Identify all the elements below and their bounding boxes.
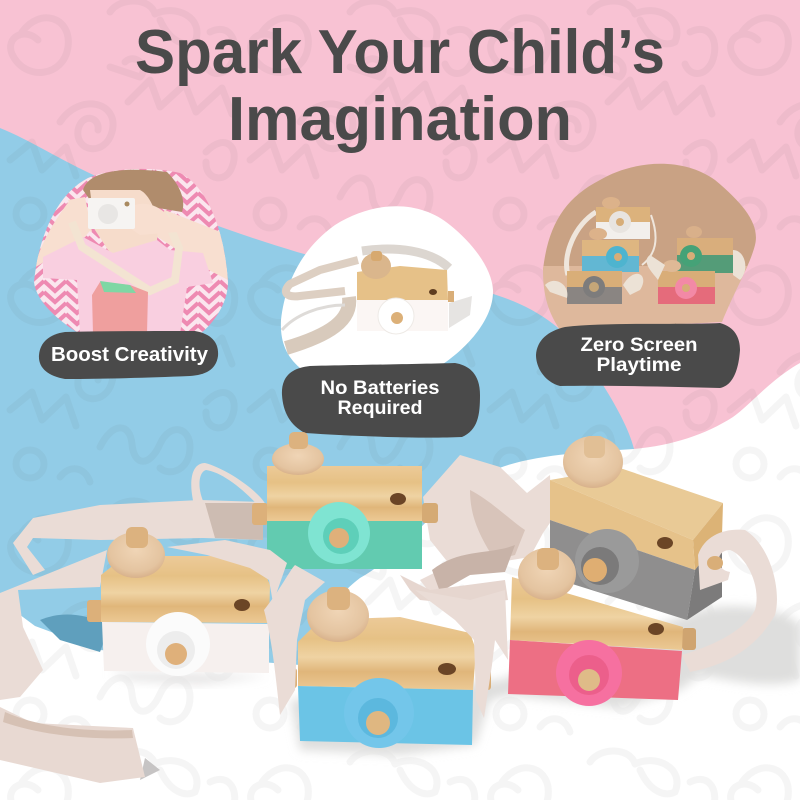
face and neck [90, 190, 158, 257]
label: No Batteries Required: No Batteries [320, 377, 440, 399]
label: No Batteries Required: Required [338, 397, 422, 419]
icon: small grey camera [545, 271, 643, 304]
label: Zero Screen Playtime [536, 323, 740, 388]
icon: small pink camera [647, 255, 715, 304]
hands [68, 197, 92, 232]
icon: green camera [252, 432, 438, 569]
strap: grey camera right loop [682, 530, 777, 672]
icon: small white camera [567, 197, 656, 275]
strawberry print [92, 282, 148, 334]
title: Imagination [228, 85, 572, 154]
strap [76, 238, 182, 296]
label: Zero Screen Playtime: Playtime [596, 354, 682, 376]
label: Boost Creativity: Boost Creativity [51, 344, 209, 366]
arms [36, 202, 90, 267]
strap: back right loop of green camera [400, 455, 552, 605]
background: white lower right area [0, 363, 800, 800]
photo: five wooden cameras [0, 432, 800, 783]
icon: pink camera [508, 548, 696, 706]
small white camera [88, 198, 135, 229]
label: Boost Creativity [39, 331, 218, 379]
label: Zero Screen Playtime: Zero Screen [580, 334, 698, 356]
soft shadows under cameras [40, 606, 800, 780]
icon: camera strap [282, 249, 449, 348]
strap: over white camera [167, 540, 287, 603]
strap: upper loop of white camera [0, 463, 266, 783]
icon: grey camera [550, 436, 777, 672]
shirt [43, 237, 213, 334]
title [135, 18, 665, 154]
hair [83, 170, 183, 212]
icon: white camera [87, 527, 287, 676]
label: No Batteries Required [282, 363, 480, 438]
background: blue wave [0, 128, 634, 665]
photo: four cameras on tan blob [540, 160, 760, 332]
icon: blue camera [264, 565, 508, 748]
icon: small green camera [677, 226, 745, 280]
photo: girl with camera [30, 165, 230, 335]
title: Spark Your Child’s [135, 18, 665, 87]
icon: small blue camera [582, 228, 639, 272]
strap: blue camera side tabs [264, 565, 325, 715]
icon: small camera body [357, 300, 448, 331]
photo: white camera on white blob [281, 206, 493, 368]
